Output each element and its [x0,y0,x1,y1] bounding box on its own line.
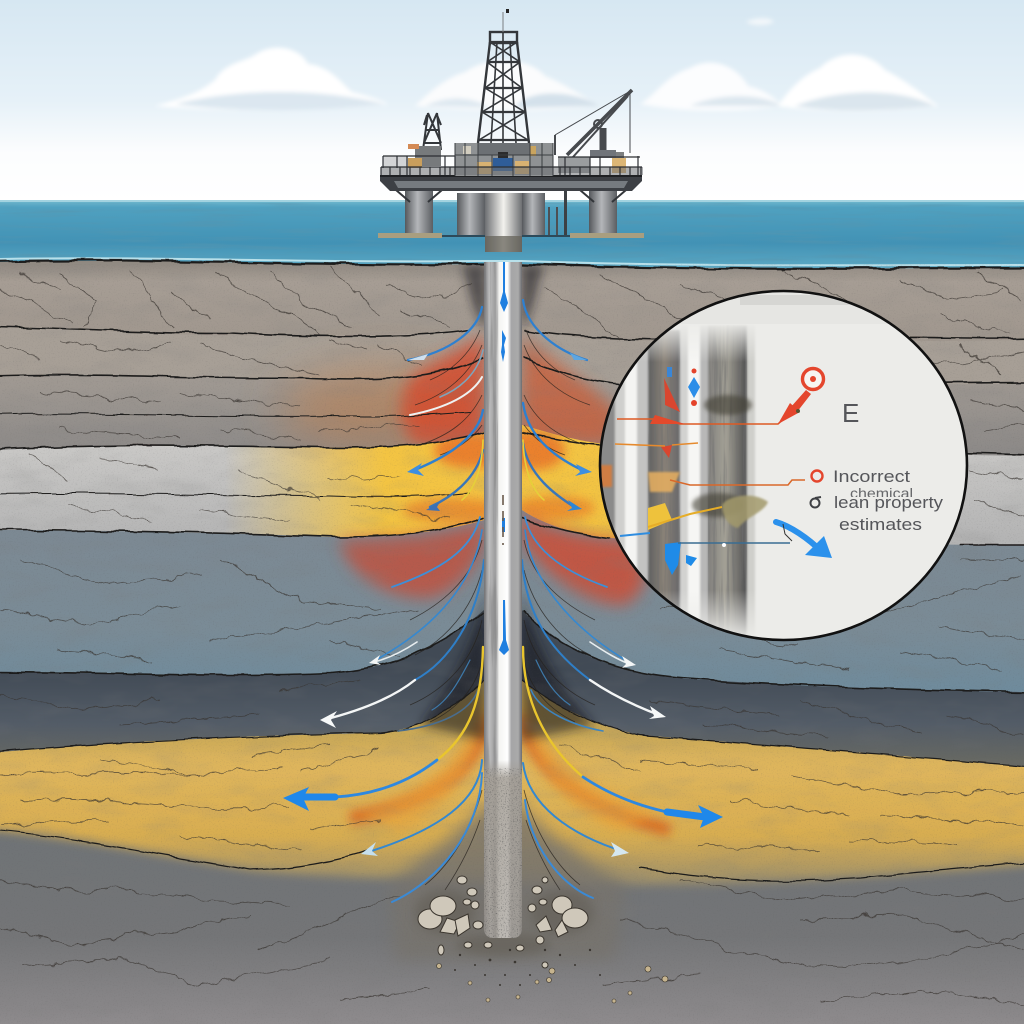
stratum 5: blue grey [0,400,1024,692]
derrick tower [478,12,529,143]
wellbore casing [484,262,522,940]
grey rubble wedge below reservoir [390,805,625,960]
clouds [155,18,938,111]
sea [0,200,1024,272]
platform legs [378,190,644,238]
coloured patches in columns [600,367,700,575]
mast tip [506,9,509,13]
fracture lines: long white-tipped curves [323,560,662,731]
leader line: middle [670,480,805,485]
dark shadow around the wellbore [420,265,595,740]
leader line: top [617,418,782,425]
arrowheads [283,353,723,857]
callout label: estimates: estimates [839,515,922,534]
central riser [485,193,522,252]
stratum 3: warm grey [0,300,1024,456]
zoomed well columns [601,295,852,635]
leader line: lower [678,542,790,544]
fracture lines: reservoir main flow [300,647,705,902]
texture clusters [692,395,752,517]
magnifier callout [598,290,967,640]
rock grain texture [0,264,1024,1024]
casing grain [484,768,522,938]
oil platform [378,9,644,252]
small derrick [423,113,441,150]
rock mottling [0,264,1024,1024]
leader line: yellow [648,507,722,527]
stratum 1: upper taupe [0,261,1024,342]
module outlines [455,143,553,176]
callout arrow: blue [776,522,832,558]
lens ring [600,291,967,640]
callout label: property: lean property [834,493,944,512]
callout marker: dark ring [810,497,821,508]
deck modules [381,143,643,176]
dark hatching along the fracture fans [410,330,595,890]
deck [380,176,642,191]
callout marker: red pin [778,368,824,424]
sediment patch [722,496,768,528]
callout backing [852,497,912,498]
stratum 7: yellow reservoir [0,600,1024,884]
callout marker: small ring [812,470,822,482]
scaled lower casing [484,760,522,940]
flow marks in casing [499,262,509,655]
deck railings [381,156,642,175]
stratum 8: deep grey base [0,700,1024,1024]
leader line: orange short [615,443,698,446]
sky background [0,0,1024,202]
stratum 6: dark shale [0,500,1024,767]
crane [555,90,632,157]
rubble at the base of the well [415,876,668,1003]
heat glow: hydrate and reaction zones [225,335,670,832]
strata boundary lines [0,261,1024,881]
stratum 4: pale grey [0,446,1024,545]
stratum 2: taupe [0,280,1024,386]
cracks in the rock [0,268,1024,1005]
callout label: letter: E [842,398,859,428]
callout label: incorrect: Incorrect [833,467,910,486]
rock strata [0,261,1024,1024]
callout label: overlapped text: chemical [850,485,913,501]
fracture lines: upper left and right [372,300,632,664]
casing streak texture [485,262,498,774]
